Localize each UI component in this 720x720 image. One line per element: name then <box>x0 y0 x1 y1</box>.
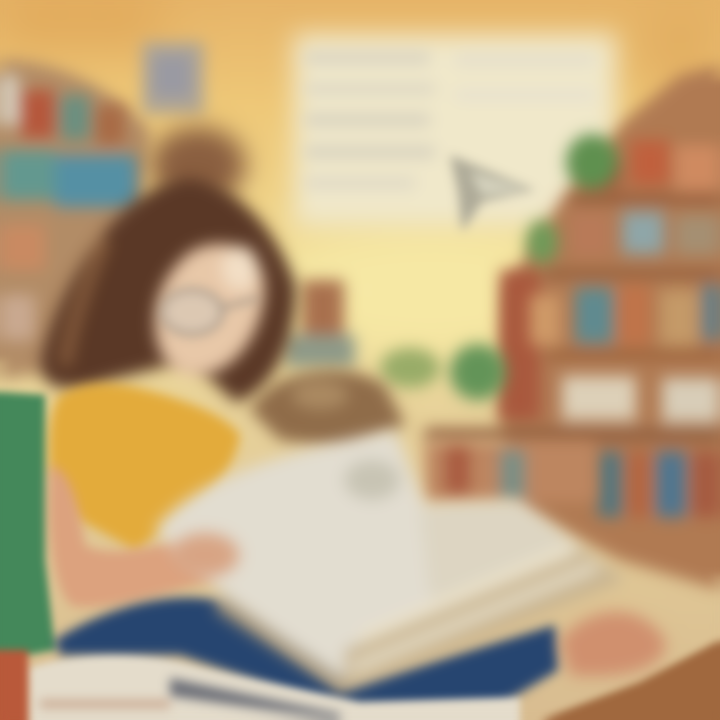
picture frame top left <box>142 42 204 114</box>
open book <box>155 430 625 695</box>
right bookshelf books <box>425 140 720 517</box>
brown cat shape <box>250 370 405 450</box>
lower-left red cushion <box>0 650 28 720</box>
glasses <box>162 290 258 334</box>
right bookshelf frame <box>500 65 720 590</box>
hand <box>171 533 239 577</box>
green chair <box>0 392 55 660</box>
paper text lines <box>305 52 595 188</box>
stack of white pages bottom <box>30 655 520 720</box>
wooden floor bottom right <box>540 640 720 720</box>
hair top blur <box>150 127 246 203</box>
knee / leg <box>560 612 665 676</box>
blue jeans <box>55 598 558 705</box>
wall glow <box>0 0 720 360</box>
plants <box>380 134 618 400</box>
yellow shirt <box>49 383 240 550</box>
left bookshelf <box>0 60 150 380</box>
face <box>155 244 264 376</box>
arm <box>48 465 235 607</box>
hair <box>41 178 296 402</box>
paper panel on wall <box>294 34 616 226</box>
books under shelf <box>285 280 595 502</box>
paper plane <box>450 155 535 232</box>
